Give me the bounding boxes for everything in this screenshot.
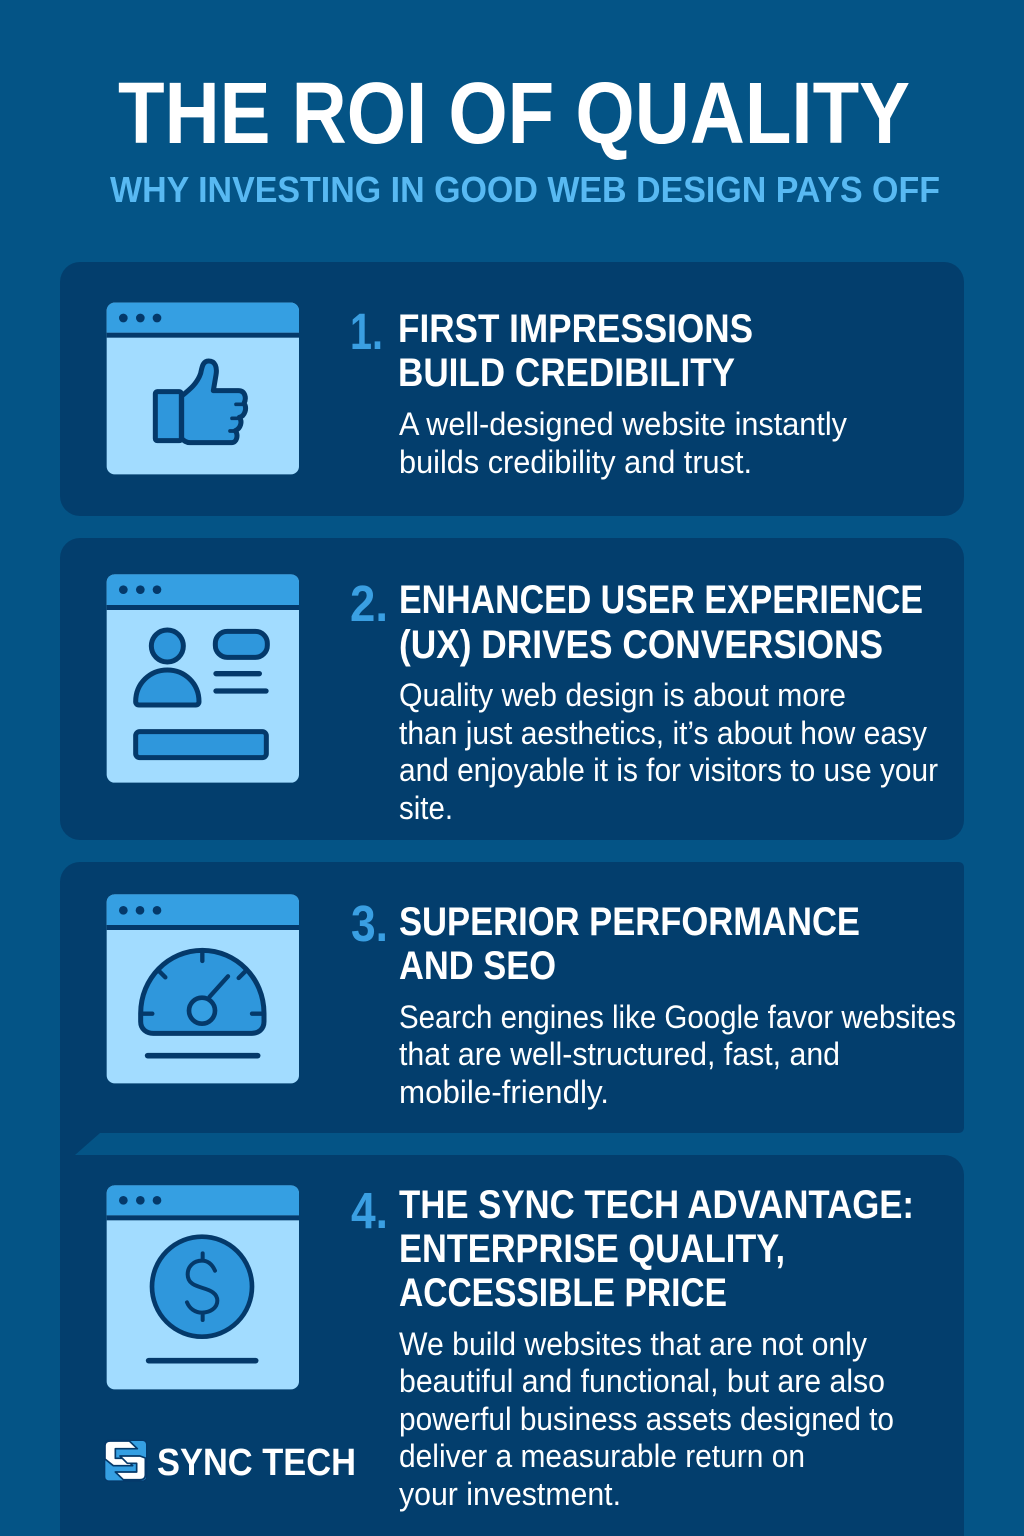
body text 2: Quality web design is about more	[399, 677, 846, 713]
body text 4	[399, 1326, 894, 1512]
heading 1	[398, 307, 753, 395]
number 2: 2.	[350, 575, 388, 632]
body text 3	[399, 999, 956, 1110]
body text 3: that are well-structured, fast, and	[399, 1036, 840, 1072]
body text 3: Search engines like Google favor websites	[399, 999, 956, 1035]
heading 3	[399, 900, 860, 988]
heading 1: BUILD CREDIBILITY	[398, 351, 735, 395]
icon: browser window with dollar coin	[107, 1185, 299, 1389]
heading 2: ENHANCED USER EXPERIENCE	[399, 578, 923, 622]
heading 4: THE SYNC TECH ADVANTAGE:	[399, 1183, 914, 1227]
body text 4: your investment.	[399, 1476, 621, 1512]
number 1: 1.	[350, 303, 383, 360]
heading 4: ACCESSIBLE PRICE	[399, 1271, 727, 1315]
heading 3: SUPERIOR PERFORMANCE	[399, 900, 860, 944]
body text 4: We build websites that are not only	[399, 1326, 867, 1362]
logo: Sync Tech	[105, 1440, 356, 1484]
body text 1: A well-designed website instantly	[399, 406, 847, 442]
number 3: 3.	[351, 895, 388, 952]
body text 2	[399, 677, 938, 826]
logo wordmark: SYNC TECH	[157, 1442, 356, 1484]
body text 1: builds credibility and trust.	[399, 444, 752, 480]
body text 4: deliver a measurable return on	[399, 1438, 805, 1474]
panel 1: first impressions	[60, 262, 964, 516]
body text 2: than just aesthetics, it’s about how easy	[399, 715, 927, 751]
body text 2: and enjoyable it is for visitors to use your	[399, 752, 938, 788]
heading 4	[399, 1183, 914, 1315]
body text 1	[399, 406, 847, 480]
body text 4: powerful business assets designed to	[399, 1401, 894, 1437]
heading 1: FIRST IMPRESSIONS	[398, 307, 753, 351]
body text 4: beautiful and functional, but are also	[399, 1363, 885, 1399]
heading 3: AND SEO	[399, 944, 556, 988]
panel 4: Sync Tech advantage	[60, 1133, 964, 1536]
heading 2	[399, 578, 923, 667]
title: THE ROI OF QUALITY	[118, 65, 910, 162]
number 4: 4.	[351, 1182, 388, 1239]
panel 2: user experience	[60, 538, 964, 840]
icon: browser window with speedometer	[107, 894, 299, 1083]
logo mark	[105, 1440, 147, 1481]
icon: browser window with user profile	[107, 574, 299, 783]
heading 4: ENTERPRISE QUALITY,	[399, 1227, 785, 1271]
body text 3: mobile-friendly.	[399, 1074, 609, 1110]
body text 2: site.	[399, 790, 453, 826]
icon: browser window with thumbs up	[107, 303, 299, 474]
heading 2: (UX) DRIVES CONVERSIONS	[399, 623, 883, 667]
subtitle: WHY INVESTING IN GOOD WEB DESIGN PAYS OFF	[110, 169, 940, 210]
panel 3: performance and SEO	[60, 862, 964, 1139]
